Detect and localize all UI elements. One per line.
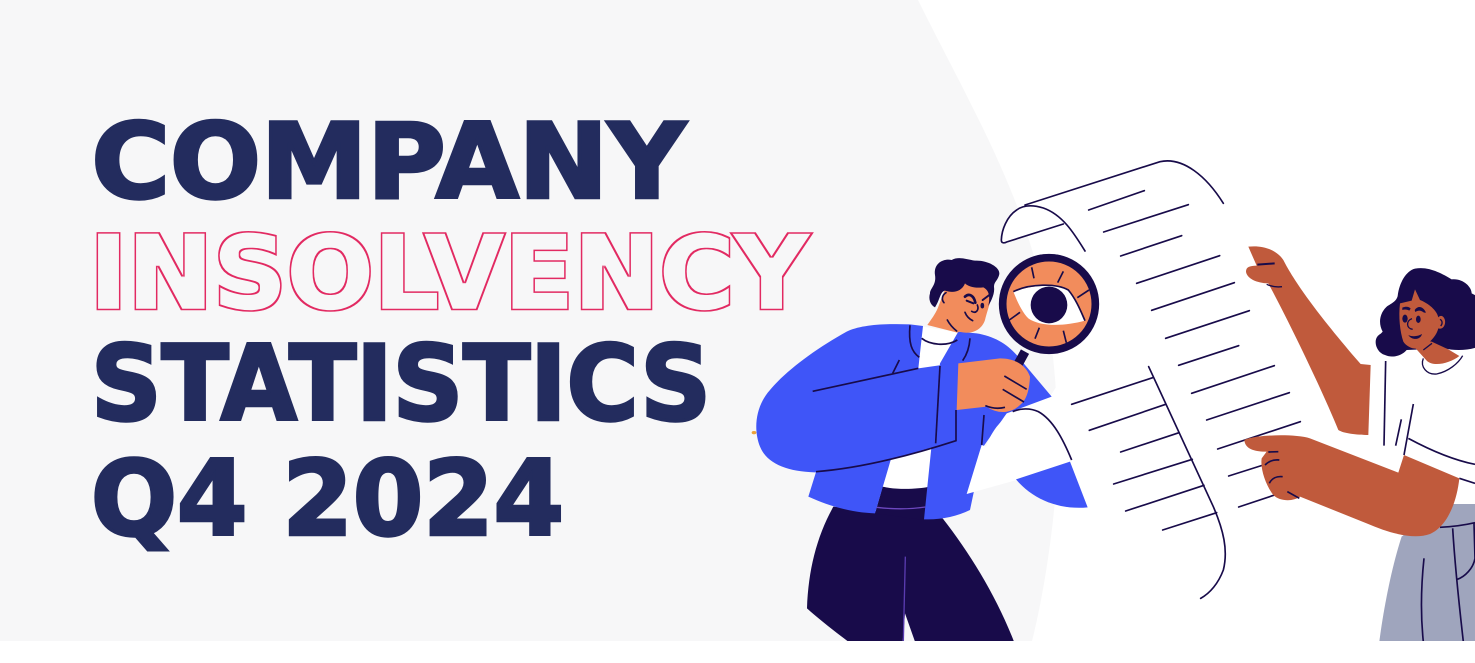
face	[927, 283, 993, 333]
background panel	[0, 0, 1057, 641]
trousers	[807, 507, 1014, 642]
title: Q4 2024	[91, 440, 564, 560]
collar	[1422, 356, 1463, 374]
shirt	[882, 486, 928, 489]
head	[927, 258, 999, 333]
man	[752, 258, 1095, 642]
magnifier handle	[1014, 352, 1025, 372]
title: STATISTICS	[91, 324, 711, 444]
jacket hem	[1016, 462, 1088, 508]
jacket	[808, 457, 892, 513]
neck	[1416, 341, 1460, 364]
orange dot	[752, 431, 756, 434]
face details	[1402, 307, 1426, 339]
woman head	[1376, 268, 1475, 364]
magnifying glass	[1003, 258, 1095, 350]
title	[90, 102, 810, 560]
title: INSOLVENCY	[90, 214, 810, 332]
face	[1399, 289, 1445, 349]
hair	[1376, 268, 1475, 357]
raised arm	[1246, 246, 1371, 435]
face details	[942, 293, 991, 331]
woman	[1244, 246, 1475, 642]
illustration: paper and people	[752, 161, 1475, 642]
hand	[957, 358, 1030, 412]
belt	[876, 486, 928, 516]
pointing arm	[1244, 435, 1459, 536]
shirt lines	[1384, 361, 1475, 483]
curled paper lower	[966, 422, 1001, 494]
paper sheet	[1000, 160, 1302, 600]
hair	[929, 258, 999, 307]
title: COMPANY	[92, 102, 687, 222]
paper text lines	[1072, 191, 1300, 530]
jacket lines	[813, 325, 984, 472]
skirt	[1379, 504, 1475, 642]
